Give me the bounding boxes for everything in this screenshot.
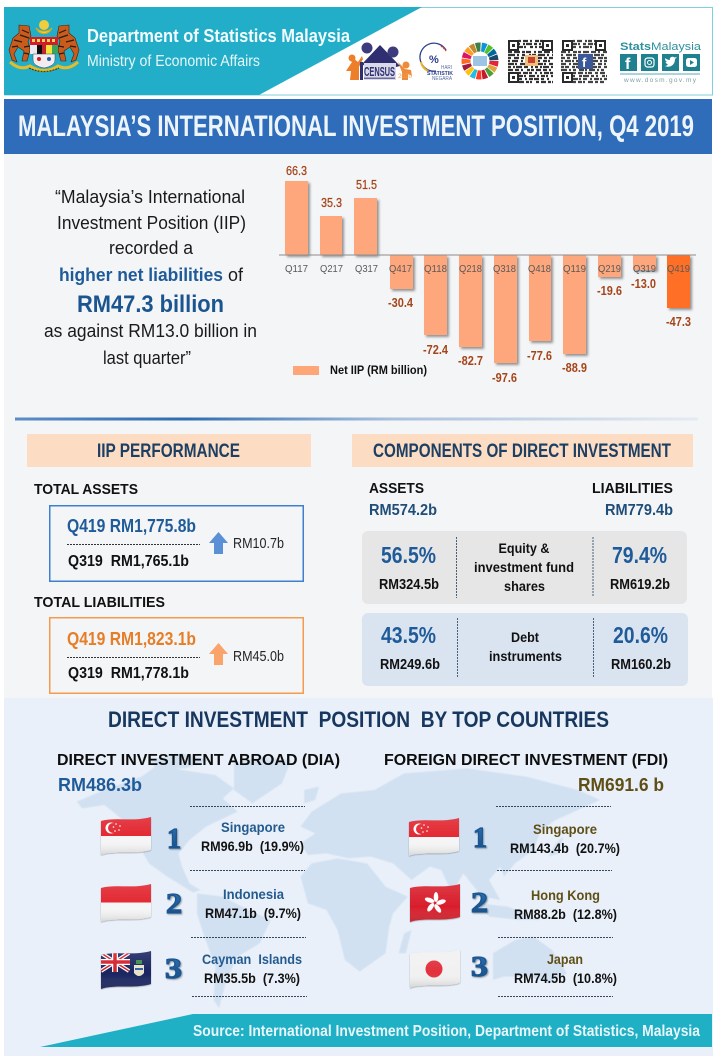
- logo: hari statistik negara: [420, 43, 453, 82]
- quarter labels: Q317: [355, 263, 378, 275]
- chart legend: Net IIP (RM billion): [330, 363, 427, 377]
- card: total liabilities: Q419 RM1,823.1b: [67, 629, 196, 649]
- chart bars: [285, 181, 690, 363]
- logo: census 2020: [346, 42, 413, 80]
- card: total assets: [49, 505, 304, 582]
- flag: Hong Kong: [410, 884, 460, 922]
- StatsMalaysia social block: www.dosm.gov.my: [623, 77, 697, 84]
- flag: Indonesia: [101, 884, 151, 922]
- row: equity and investment fund shares: Equity &: [498, 540, 550, 556]
- title bar: [4, 99, 712, 154]
- QR code: website: [508, 40, 553, 83]
- quarter labels: Q218: [459, 263, 482, 275]
- rank 3: Cayman Islands: 3: [165, 954, 182, 985]
- ministry name: Ministry of Economic Affairs: [87, 53, 260, 70]
- rank 3: Japan: Japan: [547, 951, 583, 967]
- value labels: [286, 164, 691, 385]
- rank 3: Cayman Islands: RM35.5b (7.3%): [204, 970, 300, 986]
- quarter labels: Q118: [424, 263, 447, 275]
- card: total assets: Q419 RM1,775.8b: [67, 516, 196, 536]
- heading: IIP performance: [27, 434, 311, 467]
- value labels: -19.6: [597, 284, 622, 298]
- row: debt instruments: instruments: [489, 648, 562, 664]
- value labels: 66.3: [286, 164, 307, 178]
- rank 3: Cayman Islands: [101, 951, 302, 989]
- value labels: 51.5: [356, 178, 377, 192]
- liabilities total: LIABILITIES: [592, 480, 673, 497]
- quarter labels: Q319: [633, 263, 656, 275]
- value labels: -97.6: [492, 371, 517, 385]
- rank 1: Singapore: RM143.4b (20.7%): [510, 840, 620, 856]
- value labels: -72.4: [423, 343, 448, 357]
- organisation name: Department of Statistics Malaysia: [87, 26, 351, 46]
- row: debt instruments: Debt: [511, 629, 539, 645]
- quote text block: Investment Position (IIP): [57, 212, 246, 233]
- rank 1: Singapore: [409, 818, 620, 857]
- panel: IIP performance: [27, 434, 311, 694]
- quote text block: recorded a: [109, 237, 194, 258]
- rank 2: Hong Kong: Hong Kong: [531, 887, 600, 903]
- rank 1: Singapore: [101, 817, 304, 856]
- heading: IIP performance: IIP PERFORMANCE: [97, 441, 240, 462]
- logo: census 2020: 2020: [398, 74, 413, 80]
- rank 3: Japan: RM74.5b (10.8%): [514, 970, 617, 986]
- panel: components of direct investment: [352, 434, 693, 686]
- row: debt instruments: [362, 613, 688, 686]
- rank 2: Indonesia: Indonesia: [223, 886, 284, 902]
- row: equity and investment fund shares: shares: [504, 578, 545, 594]
- row: debt instruments: 43.5%: [381, 622, 436, 648]
- logo: hari statistik negara: NEGARA: [432, 76, 453, 82]
- value labels: -88.9: [562, 361, 587, 375]
- logo: hari statistik negara: %: [429, 54, 439, 66]
- quote text block: RM47.3 billion: [77, 291, 224, 318]
- logo: hari statistik negara: STATISTIK: [427, 71, 453, 77]
- FDI heading: FOREIGN DIRECT INVESTMENT (FDI): [384, 752, 668, 769]
- section heading: DIRECT INVESTMENT POSITION BY TOP COUNTRIES: [108, 707, 609, 732]
- StatsMalaysia social block: f: [625, 56, 631, 73]
- card: total liabilities: Q319 RM1,778.1b: [68, 665, 189, 682]
- quote text block: higher net liabilities: [59, 264, 223, 285]
- quarter labels: Q318: [493, 263, 516, 275]
- row: equity and investment fund shares: RM619.2b: [610, 577, 670, 593]
- source bar: [40, 1014, 712, 1047]
- rank 2: Indonesia: RM47.1b (9.7%): [205, 905, 301, 921]
- quote text block: last quarter”: [103, 347, 191, 368]
- QR code: facebook: [561, 40, 607, 83]
- quarter labels: [285, 263, 690, 275]
- liabilities total: [592, 480, 673, 519]
- row: debt instruments: 20.6%: [613, 622, 668, 648]
- rank 2: Indonesia: 2: [166, 889, 182, 920]
- flag: Singapore: [409, 818, 459, 857]
- rank 2: Hong Kong: 2: [471, 888, 488, 919]
- card: total liabilities: RM45.0b: [233, 648, 284, 665]
- rank 2: Hong Kong: RM88.2b (12.8%): [514, 906, 617, 922]
- quarter labels: Q417: [389, 263, 412, 275]
- panel: direct investment by top countries: [4, 698, 713, 1056]
- quote text block: [44, 186, 257, 368]
- StatsMalaysia social block: Stats Malaysia: [620, 41, 702, 53]
- header banner: [4, 7, 712, 95]
- rank 1: Singapore: RM96.9b (19.9%): [201, 838, 304, 854]
- DIA total: RM486.3b: [58, 774, 142, 795]
- StatsMalaysia social block: [620, 41, 702, 84]
- icon: up arrow blue: [209, 532, 228, 554]
- row: debt instruments: RM249.6b: [380, 657, 440, 673]
- value labels: -47.3: [666, 315, 691, 329]
- rank 2: Indonesia: [101, 884, 301, 922]
- flag: Cayman Islands: [101, 951, 151, 989]
- logo: census 2020: CENSUS: [364, 64, 395, 79]
- QR code: facebook: f: [582, 55, 587, 70]
- quote text block: “Malaysia’s International: [55, 186, 245, 207]
- logo: hari statistik negara: HARI: [441, 65, 452, 71]
- rank 1: Singapore: 1: [473, 823, 487, 854]
- value labels: -13.0: [631, 277, 656, 291]
- card: total assets: Q319 RM1,765.1b: [68, 553, 189, 570]
- quarter labels: Q117: [285, 263, 308, 275]
- assets total: [369, 480, 437, 519]
- value labels: 35.3: [321, 196, 342, 210]
- value labels: -30.4: [388, 296, 413, 310]
- quarter labels: Q418: [528, 263, 551, 275]
- quote text block: of: [228, 264, 244, 285]
- row: equity and investment fund shares: 56.5%: [381, 542, 436, 568]
- world map background: [77, 753, 600, 1008]
- FDI total: RM691.6 b: [578, 774, 664, 795]
- assets total: ASSETS: [369, 480, 424, 497]
- row: equity and investment fund shares: investment fund: [474, 559, 574, 575]
- panel: upper background: [4, 154, 712, 699]
- flag: Japan: [410, 950, 460, 988]
- chart legend: [293, 363, 427, 377]
- label: total assets: TOTAL ASSETS: [34, 481, 138, 498]
- rank 1: Singapore: Singapore: [221, 819, 285, 835]
- rank 1: Singapore: Singapore: [533, 821, 597, 837]
- value labels: -82.7: [458, 354, 483, 368]
- rank 2: Hong Kong: [410, 884, 617, 922]
- quarter labels: Q219: [598, 263, 621, 275]
- rank 1: Singapore: 1: [167, 824, 181, 855]
- row: equity and investment fund shares: RM324.5b: [379, 577, 439, 593]
- card: total assets: RM10.7b: [233, 535, 284, 552]
- label: total liabilities: TOTAL LIABILITIES: [34, 594, 165, 611]
- DIA heading: DIRECT INVESTMENT ABROAD (DIA): [57, 752, 340, 769]
- column: foreign direct investment: [384, 752, 668, 996]
- bar chart: net IIP: [279, 164, 696, 385]
- icon: up arrow orange: [209, 643, 228, 665]
- quarter labels: Q217: [320, 263, 343, 275]
- value labels: -77.6: [527, 349, 552, 363]
- rank 3: Japan: 3: [471, 952, 488, 983]
- quote text block: as against RM13.0 billion in: [44, 320, 257, 341]
- quarter labels: Q119: [563, 263, 586, 275]
- row: equity and investment fund shares: 79.4%: [612, 542, 667, 568]
- row: equity and investment fund shares: [362, 531, 687, 604]
- quarter labels: Q419: [667, 263, 690, 275]
- heading: components: [352, 434, 693, 467]
- flag: Singapore: [101, 817, 151, 856]
- rank 3: Cayman Islands: Cayman Islands: [202, 951, 302, 967]
- rank 3: Japan: [410, 950, 617, 988]
- icon: Malaysia coat of arms: [9, 20, 79, 72]
- assets total: RM574.2b: [369, 502, 437, 519]
- liabilities total: RM779.4b: [605, 502, 673, 519]
- card: total liabilities: [49, 617, 304, 694]
- row: debt instruments: RM160.2b: [611, 657, 671, 673]
- logo: sustainable development goals wheel: [460, 41, 500, 81]
- column: direct investment abroad: [57, 752, 340, 996]
